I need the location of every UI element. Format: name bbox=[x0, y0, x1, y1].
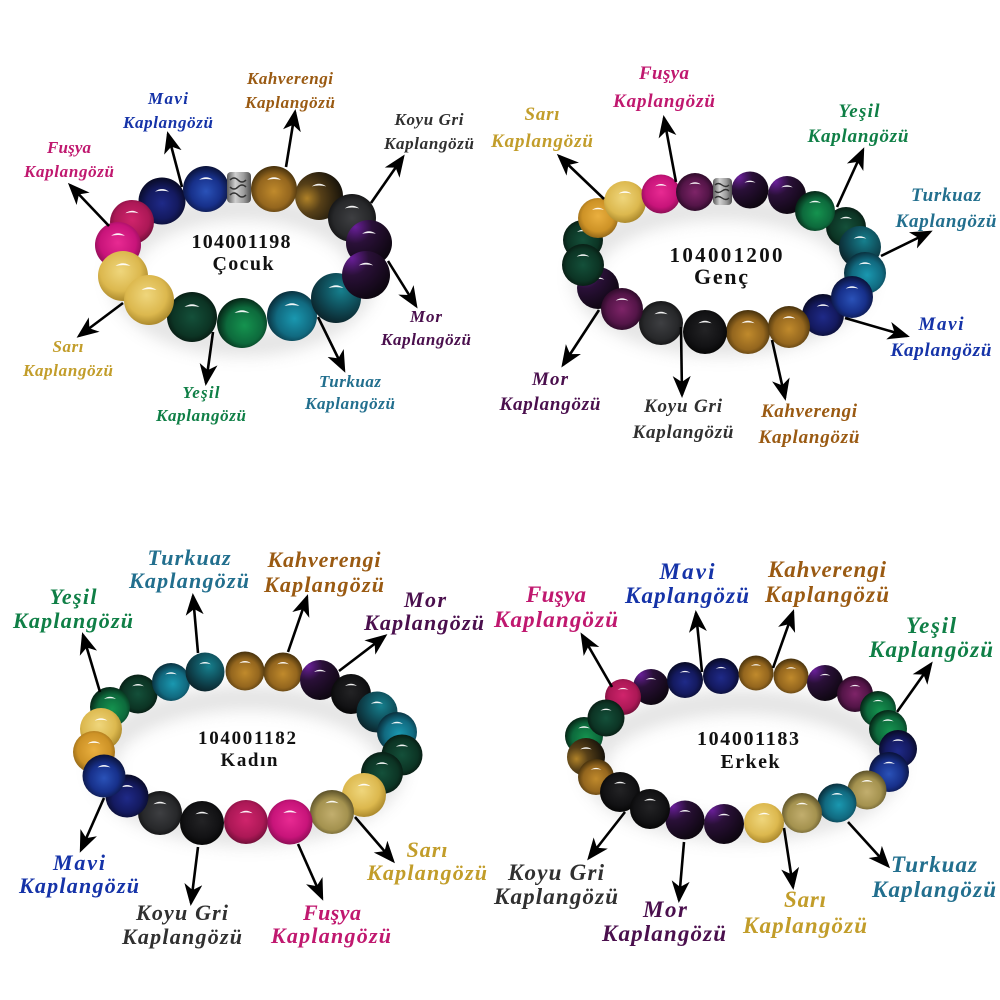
label: Yeşil Kaplangözü: Kaplangözü bbox=[806, 126, 908, 147]
label: Mavi Kaplangözü bbox=[890, 314, 992, 361]
label: Turkuaz Kaplangözü: Turkuaz bbox=[319, 372, 381, 391]
label: Mor Kaplangözü: Mor bbox=[642, 897, 688, 922]
product code: 104001182 Kadın bbox=[198, 728, 296, 771]
label: Fuşya Kaplangözü bbox=[23, 138, 114, 181]
panel: Kadın bracelet 104001182 bbox=[12, 545, 487, 949]
label: Mor Kaplangözü: Mor bbox=[531, 369, 569, 390]
label: Sarı Kaplangözü bbox=[366, 837, 487, 885]
label: Turkuaz Kaplangözü: Turkuaz bbox=[148, 545, 231, 570]
label: Fuşya Kaplangözü: Fuşya bbox=[525, 582, 586, 607]
bracelet shadow bbox=[594, 702, 890, 830]
label: Kahverengi Kaplangözü: Kaplangözü bbox=[244, 93, 335, 112]
product code: 104001183 Erkek: 104001183 bbox=[697, 728, 799, 750]
label: Mavi Kaplangözü: Mavi bbox=[147, 89, 188, 108]
label: Sarı Kaplangözü: Sarı bbox=[52, 337, 84, 356]
label: Fuşya Kaplangözü bbox=[493, 582, 618, 632]
label: Fuşya Kaplangözü: Kaplangözü bbox=[612, 91, 715, 112]
label: Sarı Kaplangözü: Kaplangözü bbox=[490, 131, 593, 152]
label: Mor Kaplangözü: Kaplangözü bbox=[601, 921, 726, 946]
bracelet beads: Genç bbox=[562, 172, 886, 354]
label: Sarı Kaplangözü: Sarı bbox=[784, 887, 826, 912]
label: Turkuaz Kaplangözü: Kaplangözü bbox=[894, 211, 996, 232]
label: Turkuaz Kaplangözü: Kaplangözü bbox=[871, 877, 996, 902]
label: Turkuaz Kaplangözü: Turkuaz bbox=[911, 185, 982, 206]
label: Kahverengi Kaplangözü: Kaplangözü bbox=[764, 582, 889, 607]
label: Sarı Kaplangözü: Kaplangözü bbox=[22, 361, 113, 380]
label: Mavi Kaplangözü: Kaplangözü bbox=[18, 873, 139, 898]
product code: 104001183 Erkek bbox=[697, 728, 799, 773]
label: Koyu Gri Kaplangözü: Koyu Gri bbox=[507, 860, 605, 885]
label: Mavi Kaplangözü: Kaplangözü bbox=[122, 113, 213, 132]
label: Mor Kaplangözü: Kaplangözü bbox=[498, 394, 600, 415]
panel: Erkek bracelet 104001183 bbox=[493, 557, 996, 946]
label: Kahverengi Kaplangözü: Kahverengi bbox=[760, 401, 858, 422]
bracelet shadow bbox=[103, 698, 393, 834]
label: Mavi Kaplangözü bbox=[122, 89, 213, 132]
bracelet shadow bbox=[584, 208, 860, 344]
label: Koyu Gri Kaplangözü: Kaplangözü bbox=[632, 422, 734, 443]
arrows: Çocuk bbox=[70, 112, 416, 383]
label: Sarı Kaplangözü: Sarı bbox=[406, 837, 448, 862]
label: Kahverengi Kaplangözü bbox=[263, 547, 384, 597]
label: Kahverengi Kaplangözü: Kahverengi bbox=[767, 557, 887, 582]
label: Mor Kaplangözü bbox=[601, 897, 726, 946]
spacer bead bbox=[227, 172, 251, 203]
product code: 104001183 Erkek: Erkek bbox=[720, 751, 780, 773]
label: Mavi Kaplangözü bbox=[624, 559, 749, 608]
label: Fuşya Kaplangözü: Kaplangözü bbox=[493, 607, 618, 632]
label: Yeşil Kaplangözü: Yeşil bbox=[182, 383, 220, 402]
label: Sarı Kaplangözü bbox=[490, 104, 593, 152]
label: Mor Kaplangözü bbox=[380, 307, 471, 349]
product code: 104001198 Çocuk: 104001198 bbox=[192, 231, 290, 253]
label: Fuşya Kaplangözü: Kaplangözü bbox=[270, 923, 391, 948]
label: Yeşil Kaplangözü bbox=[12, 584, 133, 633]
label: Yeşil Kaplangözü: Kaplangözü bbox=[868, 637, 993, 662]
label: Kahverengi Kaplangözü: Kaplangözü bbox=[263, 572, 384, 597]
product code: 104001198 Çocuk bbox=[192, 231, 290, 275]
label: Yeşil Kaplangözü: Yeşil bbox=[838, 101, 880, 122]
label: Fuşya Kaplangözü bbox=[612, 63, 715, 112]
label: Turkuaz Kaplangözü bbox=[894, 185, 996, 232]
spacer bead bbox=[713, 178, 732, 205]
label: Koyu Gri Kaplangözü: Koyu Gri bbox=[394, 110, 464, 129]
label: Yeşil Kaplangözü: Kaplangözü bbox=[155, 406, 246, 425]
label: Koyu Gri Kaplangözü: Kaplangözü bbox=[383, 134, 474, 153]
label: Sarı Kaplangözü bbox=[22, 337, 113, 380]
label: Turkuaz Kaplangözü: Kaplangözü bbox=[304, 394, 395, 413]
label: Yeşil Kaplangözü: Yeşil bbox=[906, 613, 957, 638]
label: Mavi Kaplangözü bbox=[18, 850, 139, 898]
label: Koyu Gri Kaplangözü: Koyu Gri bbox=[643, 396, 723, 417]
label: Koyu Gri Kaplangözü bbox=[632, 396, 734, 443]
label: Mor Kaplangözü bbox=[498, 369, 600, 415]
label: Mor Kaplangözü: Kaplangözü bbox=[380, 330, 471, 349]
bracelet beads: Çocuk bbox=[95, 166, 392, 348]
label: Fuşya Kaplangözü: Fuşya bbox=[302, 900, 361, 925]
label: Koyu Gri Kaplangözü: Kaplangözü bbox=[121, 924, 242, 949]
label: Koyu Gri Kaplangözü bbox=[383, 110, 474, 153]
label: Kahverengi Kaplangözü bbox=[764, 557, 889, 607]
arrows: Erkek bbox=[582, 612, 931, 900]
label: Fuşya Kaplangözü: Kaplangözü bbox=[23, 162, 114, 181]
label: Mor Kaplangözü: Kaplangözü bbox=[363, 610, 484, 635]
label: Yeşil Kaplangözü: Kaplangözü bbox=[12, 608, 133, 633]
label: Sarı Kaplangözü: Sarı bbox=[524, 104, 560, 125]
label: Sarı Kaplangözü bbox=[742, 887, 867, 938]
label: Koyu Gri Kaplangözü: Kaplangözü bbox=[493, 884, 618, 909]
label: Mor Kaplangözü: Mor bbox=[409, 307, 442, 326]
label: Turkuaz Kaplangözü bbox=[128, 545, 249, 593]
label: Mavi Kaplangözü: Mavi bbox=[52, 850, 106, 875]
label: Mavi Kaplangözü: Kaplangözü bbox=[890, 340, 992, 361]
bracelet beads: Erkek bbox=[565, 656, 917, 844]
label: Turkuaz Kaplangözü bbox=[304, 372, 395, 413]
label: Mavi Kaplangözü: Kaplangözü bbox=[624, 583, 749, 608]
label: Turkuaz Kaplangözü bbox=[871, 852, 996, 902]
label: Turkuaz Kaplangözü: Turkuaz bbox=[891, 852, 977, 877]
label: Yeşil Kaplangözü bbox=[868, 613, 993, 662]
label: Turkuaz Kaplangözü: Kaplangözü bbox=[128, 568, 249, 593]
label: Koyu Gri Kaplangözü bbox=[493, 860, 618, 909]
label: Fuşya Kaplangözü bbox=[270, 900, 391, 948]
label: Koyu Gri Kaplangözü: Koyu Gri bbox=[135, 900, 229, 925]
label: Yeşil Kaplangözü bbox=[806, 101, 908, 147]
product code: 104001182 Kadın: Kadın bbox=[220, 750, 278, 771]
product code: 104001200 Genç: Genç bbox=[694, 264, 748, 289]
label: Mavi Kaplangözü: Mavi bbox=[658, 559, 715, 584]
product code: 104001182 Kadın: 104001182 bbox=[198, 728, 296, 749]
label: Kahverengi Kaplangözü bbox=[244, 69, 335, 112]
label: Fuşya Kaplangözü: Fuşya bbox=[46, 138, 92, 157]
label: Kahverengi Kaplangözü bbox=[758, 401, 860, 448]
label: Sarı Kaplangözü: Kaplangözü bbox=[366, 860, 487, 885]
label: Fuşya Kaplangözü: Fuşya bbox=[638, 63, 690, 84]
label: Mavi Kaplangözü: Mavi bbox=[918, 314, 964, 335]
label: Kahverengi Kaplangözü: Kahverengi bbox=[266, 547, 381, 572]
panel: Çocuk bracelet 104001198 bbox=[22, 69, 474, 425]
label: Yeşil Kaplangözü: Yeşil bbox=[50, 584, 97, 609]
product code: 104001200 Genç: 104001200 bbox=[670, 243, 782, 267]
bracelet shadow bbox=[121, 208, 365, 344]
label: Sarı Kaplangözü: Kaplangözü bbox=[742, 913, 867, 938]
product code: 104001200 Genç bbox=[670, 243, 782, 289]
panel: Genç bracelet 104001200 bbox=[490, 63, 996, 448]
arrows: Genç bbox=[559, 118, 930, 398]
label: Kahverengi Kaplangözü: Kaplangözü bbox=[758, 427, 860, 448]
label: Kahverengi Kaplangözü: Kahverengi bbox=[246, 69, 333, 88]
label: Mor Kaplangözü: Mor bbox=[403, 587, 446, 612]
label: Mor Kaplangözü bbox=[363, 587, 484, 635]
label: Koyu Gri Kaplangözü bbox=[121, 900, 242, 949]
arrows: Kadın bbox=[81, 596, 393, 903]
bracelet beads: Kadın bbox=[73, 652, 422, 845]
label: Yeşil Kaplangözü bbox=[155, 383, 246, 425]
product code: 104001198 Çocuk: Çocuk bbox=[212, 253, 274, 275]
